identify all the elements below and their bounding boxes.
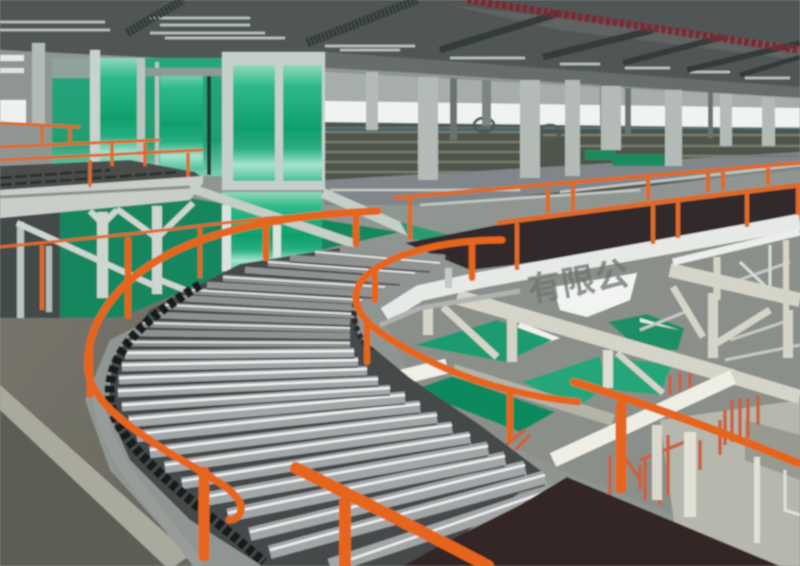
conveyor bed: [108, 247, 545, 566]
rail right: [574, 382, 798, 463]
columns: [366, 72, 775, 180]
front orange handrails: [88, 211, 798, 566]
roof trusses: [127, 0, 800, 75]
back orange railings: [0, 123, 800, 310]
watermark: 有限公: [525, 255, 632, 310]
post near curve: [198, 472, 210, 556]
dark belt, far conveyor: [405, 187, 800, 270]
windows: [0, 43, 800, 130]
ceiling: [0, 0, 800, 95]
rollers: [118, 249, 560, 566]
green glass enclosure: [52, 50, 325, 190]
posts inner: [367, 245, 510, 440]
left platform: [0, 160, 470, 244]
main beam: [325, 52, 800, 98]
red fences: [500, 370, 758, 505]
inner chain: [354, 295, 372, 352]
wall below left platform: [0, 192, 400, 318]
bottom dark platform: [403, 477, 780, 566]
white guard beam: [380, 222, 800, 325]
shelving area: [325, 118, 800, 205]
right lower structure background: [380, 225, 800, 566]
steel frame: [390, 240, 800, 543]
gray floor left: [0, 268, 250, 566]
rail outer: [88, 211, 378, 520]
rail front: [296, 468, 488, 566]
rail inner: [356, 240, 578, 402]
post right: [616, 406, 626, 488]
drive chain: [110, 285, 264, 562]
posts outer: [90, 214, 356, 395]
outer curved frame: [98, 395, 200, 566]
post front: [339, 502, 351, 566]
